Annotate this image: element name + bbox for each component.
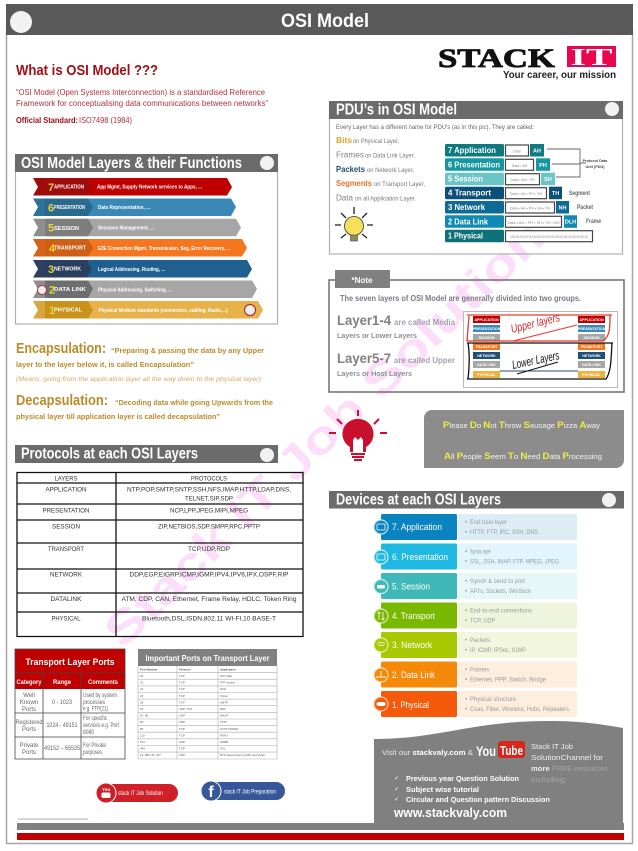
- layer ribbon 4: E2E Connection Mgmt, Transmission, Seg, Error Recovery, ...: [98, 246, 231, 252]
- diagram: PDU encapsulation stack: 1010101010101010101010101010101010101010: [510, 235, 588, 239]
- table: transport layer ports: 8080: [83, 730, 95, 736]
- diagram: upper and lower layers: SESSION: [479, 336, 495, 340]
- PDU names list: on Physical Layer,: [353, 139, 399, 145]
- table: important ports on transport layer: SMTP: [220, 700, 228, 704]
- text block: encapsulation: layer to the layer below it, is called Encapsulation”: [16, 360, 194, 369]
- PDU names list: Packets: [336, 164, 365, 174]
- table: important ports on transport layer: Telnet: [220, 694, 228, 698]
- checklist: ✓: [394, 797, 399, 803]
- logo: Stack IT: [438, 44, 616, 81]
- checklist: Previous year Question Solution: [406, 774, 519, 783]
- diagram: upper and lower layers: APPLICATION: [579, 318, 604, 322]
- diagram: PDU encapsulation stack: Data • AH • PH • SH: [510, 192, 542, 196]
- diagram: PDU encapsulation stack: PH: [539, 163, 547, 169]
- table: important ports on transport layer: TCP: [179, 674, 185, 678]
- panel: devices list: [374, 514, 577, 717]
- heading: what is OSI model: What is OSI Model ???: [16, 62, 158, 79]
- button: youtube channel: You: [102, 787, 110, 792]
- panel: promo for stackvaly: Stack IT Job: [531, 742, 573, 751]
- panel: promo for stackvaly: including:: [531, 775, 567, 784]
- row: physical: 1. Physical: [392, 700, 429, 711]
- button: youtube channel: [96, 783, 178, 803]
- diagram: PDU encapsulation stack: Data • AH • PH: [511, 178, 535, 182]
- text block: decapsulation: [16, 392, 273, 421]
- row: transport: •: [465, 608, 467, 614]
- heading bar: devices: Devices at each OSI Layers: [336, 492, 501, 508]
- table: protocols at each layer: LAYERS: [54, 476, 78, 482]
- table: important ports on transport layer: 21: [140, 681, 144, 685]
- row: physical: •: [465, 707, 467, 713]
- PDU names list: on Network Layer,: [367, 168, 414, 174]
- PDU names list: Frames: [336, 150, 364, 160]
- table: transport layer ports: Used by system: [83, 693, 117, 699]
- logo: Stack IT: Your career, our mission: [503, 70, 616, 81]
- row: network: [374, 632, 577, 658]
- table: important ports on transport layer: 25: [140, 700, 144, 704]
- diagram: upper and lower layers: DATA LINK: [582, 363, 601, 367]
- table: important ports on transport layer: TCP: [179, 687, 185, 691]
- table: important ports on transport layer: UDP: [179, 714, 185, 718]
- row: network: IP, ICMP, IPSec, IGMP: [470, 648, 526, 654]
- table: protocols at each layer: DDP,EGP,EIGRP,ICMP,IGMP,IPV4,IPV6,IPX,OSPF,RIP: [130, 572, 288, 578]
- PDU names list: Segments: [336, 178, 372, 188]
- table: important ports on transport layer: FTP data: [220, 674, 232, 678]
- icon: yellow light bulb: [335, 207, 373, 241]
- row: transport: [374, 602, 577, 628]
- layer ribbon 3: [33, 260, 252, 278]
- row: physical: [374, 691, 577, 717]
- table: transport layer ports: Category: [16, 679, 42, 686]
- note tab: *Note: [352, 276, 373, 285]
- table: protocols at each layer: PRESENTATION: [42, 508, 90, 514]
- PDU names list: on Transport Layer,: [374, 182, 425, 188]
- row: data link: •: [465, 678, 467, 684]
- layer ribbon 6: PRESENTATION: [54, 205, 85, 211]
- table: important ports on transport layer: TCP: [179, 681, 185, 685]
- row: transport: TCP, UDP: [470, 618, 495, 624]
- layer ribbon 3: Logical Addressing, Routing, ...: [98, 267, 166, 273]
- row: session: •: [465, 579, 467, 585]
- diagram: upper and lower layers: TRANSPORT: [580, 345, 603, 349]
- text block: OSI definition: “OSI Model (Open Systems Interconnection) is a standardised Reference: [16, 87, 265, 97]
- row: physical: Physical structure: [470, 697, 517, 703]
- checklist: Circular and Question pattern Discussion: [406, 795, 550, 804]
- diagram: upper and lower layers: TRANSPORT: [475, 345, 498, 349]
- text block: layer groups: Layer1-4: [337, 312, 391, 328]
- table: transport layer ports: For Private: [83, 743, 107, 749]
- text block: OSI definition: ISO7498 (1984): [79, 115, 132, 125]
- table: important ports on transport layer: Port Number: [140, 668, 158, 672]
- table: important ports on transport layer: UDP: [179, 753, 185, 757]
- table: protocols at each layer: Bluetooth,DSL,ISDN,802.11 WI-FI,10 BASE-T: [142, 616, 276, 622]
- table: important ports on transport layer: RTP-based Voice (VoIP) and Video: [220, 753, 265, 757]
- row: session: •: [465, 589, 467, 595]
- diagram: PDU encapsulation stack: 2 Data Link: [448, 217, 489, 226]
- layer ribbon 7: [33, 178, 232, 196]
- panel: promo for stackvaly: more FREE resources: [531, 764, 608, 773]
- row: application: HTTP, FTP, IRC, SSH, DNS: [470, 530, 538, 536]
- layer ribbon 3: 3: [48, 264, 54, 276]
- table: important ports on transport layer: HTTP (WWW): [220, 727, 238, 731]
- table: protocols at each layer: TCP,UDP,RDP: [188, 546, 230, 553]
- layer ribbon 4: [33, 239, 247, 256]
- row: network: •: [465, 638, 467, 644]
- row: transport: 4. Transport: [392, 611, 435, 622]
- diagram: PDU encapsulation stack: 1 Physical: [448, 232, 483, 241]
- table: important ports on transport layer: SSH: [220, 687, 226, 691]
- layer ribbon 6: Data Representation, ...: [98, 205, 151, 211]
- text block: layer groups: [337, 312, 456, 378]
- table: transport layer ports: Comments: [88, 679, 118, 686]
- heading bar: protocols: Protocols at each OSI Layers: [21, 446, 198, 462]
- layer ribbon 2: Physical Addressing, Switching, ...: [98, 288, 173, 294]
- diagram: PDU encapsulation stack: NH: [559, 206, 566, 212]
- table: important ports on transport layer: TCP: [179, 727, 185, 731]
- diagram: upper and lower layers: PHYSICAL: [477, 373, 496, 377]
- table: important ports on transport layer: TCP: [179, 694, 185, 698]
- button: facebook page: stack IT Job Preparation: [224, 790, 276, 796]
- table: important ports on transport layer: 16, 384–32, 767: [140, 753, 161, 757]
- checklist: ✓: [394, 787, 399, 793]
- text block: encapsulation: Encapsulation:: [16, 340, 106, 357]
- diagram: PDU encapsulation stack: DLH: [565, 220, 576, 226]
- PDU names list: on all Application Layer.: [355, 196, 416, 202]
- logo: Stack IT: STACK: [438, 44, 556, 73]
- row: data link: •: [465, 668, 467, 674]
- panel: promo for stackvaly: [374, 721, 623, 823]
- table: protocols at each layer: SESSION: [52, 524, 80, 530]
- row: transport: End-to-end connections: [470, 608, 532, 614]
- diagram: upper and lower layers: SESSION: [584, 336, 600, 340]
- table: transport layer ports: e.g. FTP(21): [83, 706, 108, 712]
- table: transport layer ports: 49152 – 65535: [44, 746, 81, 752]
- watermark: Stack IT Job Solution: [94, 210, 554, 657]
- table: important ports on transport layer: FTP control: [220, 681, 235, 685]
- PDU names list: Bits: [336, 135, 352, 145]
- table: transport layer ports: [15, 649, 125, 759]
- table: important ports on transport layer: Important Ports on Transport Layer: [146, 653, 270, 663]
- row: presentation: •: [465, 550, 467, 556]
- row: data link: Ethernet, PPP, Switch, Bridge: [470, 678, 547, 684]
- table: important ports on transport layer: 20: [140, 674, 144, 678]
- diagram: PDU encapsulation stack: Data • AH • PH • SH • TH • NH: [508, 221, 560, 225]
- table: important ports on transport layer: TCP: [179, 733, 185, 737]
- layer ribbon 6: 6: [48, 202, 54, 214]
- row: presentation: [374, 544, 577, 570]
- table: important ports on transport layer: UDP: [179, 740, 185, 744]
- button: facebook page: f: [208, 784, 214, 801]
- panel: PDUs in OSI model: PDU’s in OSI Model: [336, 102, 457, 118]
- text block: encapsulation: [16, 340, 264, 383]
- row: application: 7. Application: [392, 522, 442, 533]
- icon: youtube logo: [476, 741, 525, 759]
- row: presentation: 6. Presentation: [392, 552, 448, 563]
- diagram: PDU encapsulation stack: TH: [552, 191, 559, 197]
- diagram: PDU encapsulation stack: Unit (PDU): [586, 165, 605, 169]
- table: transport layer ports: 1024 - 49151: [46, 723, 78, 729]
- table: transport layer ports: Ports: [22, 727, 36, 733]
- row: data link: [374, 662, 577, 688]
- diagram: upper and lower layers: NETWORK: [477, 354, 496, 358]
- table: transport layer ports: Ports: [22, 750, 36, 756]
- table: protocols at each layer: NETWORK: [50, 572, 83, 578]
- table: important ports on transport layer: 80: [140, 727, 144, 731]
- diagram: PDU encapsulation stack: 5 Session: [448, 175, 483, 184]
- diagram: PDU encapsulation stack: SH: [544, 177, 552, 183]
- table: important ports on transport layer: SNMP: [220, 740, 228, 744]
- table: important ports on transport layer: DNS: [220, 707, 226, 711]
- table: protocols at each layer: DATALINK: [50, 596, 82, 603]
- row: session: API's, Sockets, WinSock: [470, 589, 532, 595]
- table: transport layer ports: Private: [20, 743, 39, 749]
- layer ribbon 7: App Mgmt, Supply Network services to Apps, ...: [97, 184, 203, 190]
- table: protocols at each layer: [17, 472, 303, 636]
- layer ribbon 1: PHYSICAL: [54, 308, 82, 314]
- table: important ports on transport layer: 69: [140, 720, 144, 724]
- text block: layer groups: Layers or Lower Layers: [337, 331, 417, 340]
- text block: layer groups: are called Upper: [394, 356, 455, 365]
- layer ribbon 2: [33, 280, 257, 298]
- table: important ports on transport layer: 22: [140, 687, 144, 691]
- diagram: PDU encapsulation stack: 6 Presentation: [448, 160, 500, 169]
- row: data link: Frames: [470, 668, 489, 674]
- diagram: upper and lower layers: [464, 310, 618, 388]
- row: presentation: •: [465, 560, 467, 566]
- text block: decapsulation: physical layer till application layer is called decapsulation”: [16, 412, 220, 421]
- text block: OSI definition: Framework for conceptualising data communications between networks”: [16, 98, 268, 108]
- table: transport layer ports: Range: [53, 679, 71, 686]
- PDU names list: on Data Link Layer,: [365, 154, 415, 160]
- row: network: 3. Network: [392, 640, 432, 651]
- table: transport layer ports: 0 - 1023: [52, 700, 73, 706]
- icon: youtube logo: You: [476, 743, 496, 759]
- panel: promo for stackvaly: SolutionChannel for: [531, 753, 604, 762]
- table: important ports on transport layer: POP3: [220, 733, 228, 737]
- panel: PDUs in OSI model: [329, 101, 623, 254]
- PDU names list: Data: [336, 192, 353, 202]
- row: physical: Coax, Fiber, Wireless, Hubs, Repeaters: [470, 707, 569, 713]
- row: physical: •: [465, 697, 467, 703]
- panel: promo for stackvaly: Visit our stackvaly.com &: [382, 748, 473, 757]
- table: important ports on transport layer: 23: [140, 694, 144, 698]
- layer ribbon 1: 1: [49, 305, 55, 317]
- diagram: PDU encapsulation stack: Data • AH • PH • SH • TH: [510, 206, 550, 210]
- diagram: PDU encapsulation stack: 7 Application: [448, 146, 496, 155]
- row: data link: 2. Data Link: [392, 670, 435, 681]
- callout: OSI mnemonics: All People Seem To Need Data Processing: [444, 451, 602, 462]
- diagram: upper and lower layers: PRESENTATION: [473, 327, 501, 331]
- logo: Stack IT: IT: [570, 45, 612, 71]
- title bar: [6, 4, 633, 35]
- table: transport layer ports: Transport Layer Ports: [26, 657, 114, 668]
- table: transport layer ports: Well: [23, 693, 35, 699]
- table: protocols at each layer: APPLICATION: [46, 486, 86, 494]
- callout: OSI mnemonics: [424, 410, 624, 468]
- layer ribbon 5: [33, 219, 241, 236]
- row: presentation: SSL, SSH, IMAP, FTP, MPEG, JPEG: [470, 560, 559, 566]
- table: important ports on transport layer: 67, 68: [140, 714, 148, 718]
- table: important ports on transport layer: 53: [140, 707, 144, 711]
- table: protocols at each layer: TELNET,SIP,SDP: [185, 496, 233, 502]
- table: protocols at each layer: NCP,LPP,JPEG,MIPI,MPEG: [170, 508, 248, 514]
- text block: OSI definition: [16, 87, 268, 125]
- table: transport layer ports: services e.g. Port: [83, 723, 119, 729]
- row: session: Synch & send to port: [470, 579, 525, 585]
- text block: decapsulation: Decapsulation:: [16, 392, 108, 409]
- icon: youtube logo: Tube: [500, 743, 523, 758]
- table: important ports on transport layer: [138, 649, 277, 759]
- table: transport layer ports: Registered: [16, 720, 42, 726]
- text block: OSI definition: Official Standard:: [16, 115, 78, 125]
- title bar: OSI Model: [281, 11, 369, 32]
- text block: encapsulation: (Means, going from the application layer all the way down to the physical layer): [16, 376, 261, 383]
- table: important ports on transport layer: UDP: [179, 720, 185, 724]
- table: protocols at each layer: TRANSPORT: [48, 546, 84, 553]
- checklist: [394, 774, 550, 804]
- layer ribbon 5: Sessions Management, ...: [98, 226, 155, 232]
- layer ribbon 5: SESSION: [54, 226, 79, 232]
- table: important ports on transport layer: SSL: [220, 747, 226, 751]
- table: protocols at each layer: PROTOCOLS: [191, 476, 227, 482]
- note tab: [335, 270, 390, 288]
- panel: note on layer groups: [329, 270, 624, 392]
- diagram: upper and lower layers: PRESENTATION: [578, 327, 606, 331]
- table: protocols at each layer: ZIP,NETBIOS,SDP,SMPP,RPC,PPTP: [158, 524, 260, 530]
- table: transport layer ports: purposes: [83, 750, 102, 756]
- table: transport layer ports: processes: [83, 700, 105, 706]
- diagram: PDU encapsulation stack: AH: [533, 148, 541, 154]
- panel: OSI model layers and functions: [15, 154, 278, 324]
- panel: OSI model layers and functions: OSI Model Layers & their Functions: [21, 155, 242, 172]
- row: transport: •: [465, 618, 467, 624]
- diagram: PDU encapsulation stack: Frame: [586, 219, 602, 225]
- layer ribbon 5: 5: [48, 223, 54, 235]
- table: important ports on transport layer: UDP, TCP: [179, 707, 192, 711]
- layer ribbon 2: 2: [49, 284, 55, 296]
- table: transport layer ports: Ports: [22, 707, 36, 713]
- panel: note on layer groups: The seven layers of OSI Model are generally divided into two groups.: [340, 294, 581, 303]
- diagram: upper and lower layers: Lower Layers: [511, 348, 561, 372]
- layer ribbon 6: [33, 198, 236, 216]
- table: protocols at each layer: NTP,POP,SMTP,SNTP,SSH,NFS,IMAP,HTTP,LDAP,DNS,: [127, 486, 291, 494]
- diagram: PDU encapsulation stack: 3 Network: [448, 203, 486, 212]
- text block: layer groups: Layers or Host Layers: [337, 369, 412, 378]
- table: transport layer ports: For specific: [83, 716, 107, 722]
- table: important ports on transport layer: TCP: [179, 747, 185, 751]
- button: youtube channel: stack IT Job Solution: [118, 791, 163, 797]
- table: important ports on transport layer: TFTP: [220, 720, 227, 724]
- diagram: PDU encapsulation stack: Packet: [577, 205, 593, 211]
- row: application: [374, 514, 577, 540]
- table: protocols at each layer: ATM, CDP, CAN, Ethernet, Frame Relay, HDLC, Token Ring: [122, 596, 297, 603]
- table: important ports on transport layer: Application: [220, 668, 236, 672]
- row: presentation: Syntax layer: [470, 550, 491, 556]
- table: important ports on transport layer: 110: [140, 733, 145, 737]
- table: important ports on transport layer: TCP: [179, 700, 185, 704]
- checklist: Subject wise tutorial: [406, 785, 479, 794]
- checklist: ✓: [394, 776, 399, 782]
- text block: decapsulation: “Decoding data while going Upwards from the: [115, 398, 273, 407]
- layer ribbon 2: DATA LINK: [54, 287, 86, 293]
- text block: layer groups: Layer5-7: [337, 350, 391, 366]
- panel: PDUs in OSI model: Every Layer has a different name for PDU's (as in this pic). They are called:: [336, 124, 534, 131]
- callout: OSI mnemonics: Please Do Not Throw Sausage Pizza Away: [443, 420, 600, 431]
- diagram: PDU encapsulation stack: Protocol Data: [583, 159, 608, 163]
- footer bars: [17, 818, 624, 840]
- layer ribbon 3: NETWORK: [54, 266, 81, 272]
- diagram: upper and lower layers: NETWORK: [582, 354, 601, 358]
- text block: layer groups: are called Media: [394, 318, 456, 327]
- button: facebook page: [201, 781, 285, 801]
- diagram: PDU encapsulation stack: 4 Transport: [448, 189, 491, 198]
- table: important ports on transport layer: 443: [140, 747, 145, 751]
- heading bar: devices: [329, 491, 624, 508]
- diagram: upper and lower layers: PHYSICAL: [582, 373, 601, 377]
- row: session: 5. Session: [392, 582, 430, 592]
- diagram: upper and lower layers: APPLICATION: [474, 318, 499, 322]
- table: transport layer ports: Known: [20, 700, 38, 706]
- table: protocols at each layer: PHYSICAL: [52, 616, 81, 622]
- table: important ports on transport layer: DHCP: [220, 714, 228, 718]
- diagram: PDU encapsulation stack: Segment: [569, 191, 590, 197]
- layer ribbon 7: 7: [48, 182, 54, 194]
- row: network: Packets: [470, 638, 490, 644]
- row: application: •: [465, 520, 467, 526]
- diagram: PDU encapsulation stack: [445, 144, 608, 242]
- panel: promo for stackvaly: www.stackvaly.com: [393, 806, 507, 820]
- layer ribbon 1: [33, 301, 263, 318]
- table: important ports on transport layer: 161: [140, 740, 145, 744]
- diagram: upper and lower layers: Upper layers: [509, 310, 561, 336]
- row: application: End User layer: [470, 520, 507, 526]
- row: network: •: [465, 648, 467, 654]
- layer ribbon 4: TRANSPORT: [54, 246, 86, 252]
- row: application: •: [465, 530, 467, 536]
- table: important ports on transport layer: Protocol: [179, 668, 191, 672]
- diagram: upper and lower layers: DATA LINK: [477, 363, 496, 367]
- diagram: PDU encapsulation stack: Data • AH: [512, 164, 528, 168]
- layer ribbon 1: Physical Medium standards (connectors, cabling, Radio,...): [98, 308, 228, 314]
- PDU names list: [336, 135, 425, 202]
- layer ribbon 7: APPLICATION: [54, 184, 84, 190]
- row: session: [374, 573, 577, 599]
- icon: red light bulb: [329, 410, 387, 460]
- layer ribbon 4: 4: [49, 243, 56, 255]
- diagram: PDU encapsulation stack: Data: [513, 150, 521, 154]
- text block: encapsulation: “Preparing & passing the data by any Upper: [111, 346, 264, 355]
